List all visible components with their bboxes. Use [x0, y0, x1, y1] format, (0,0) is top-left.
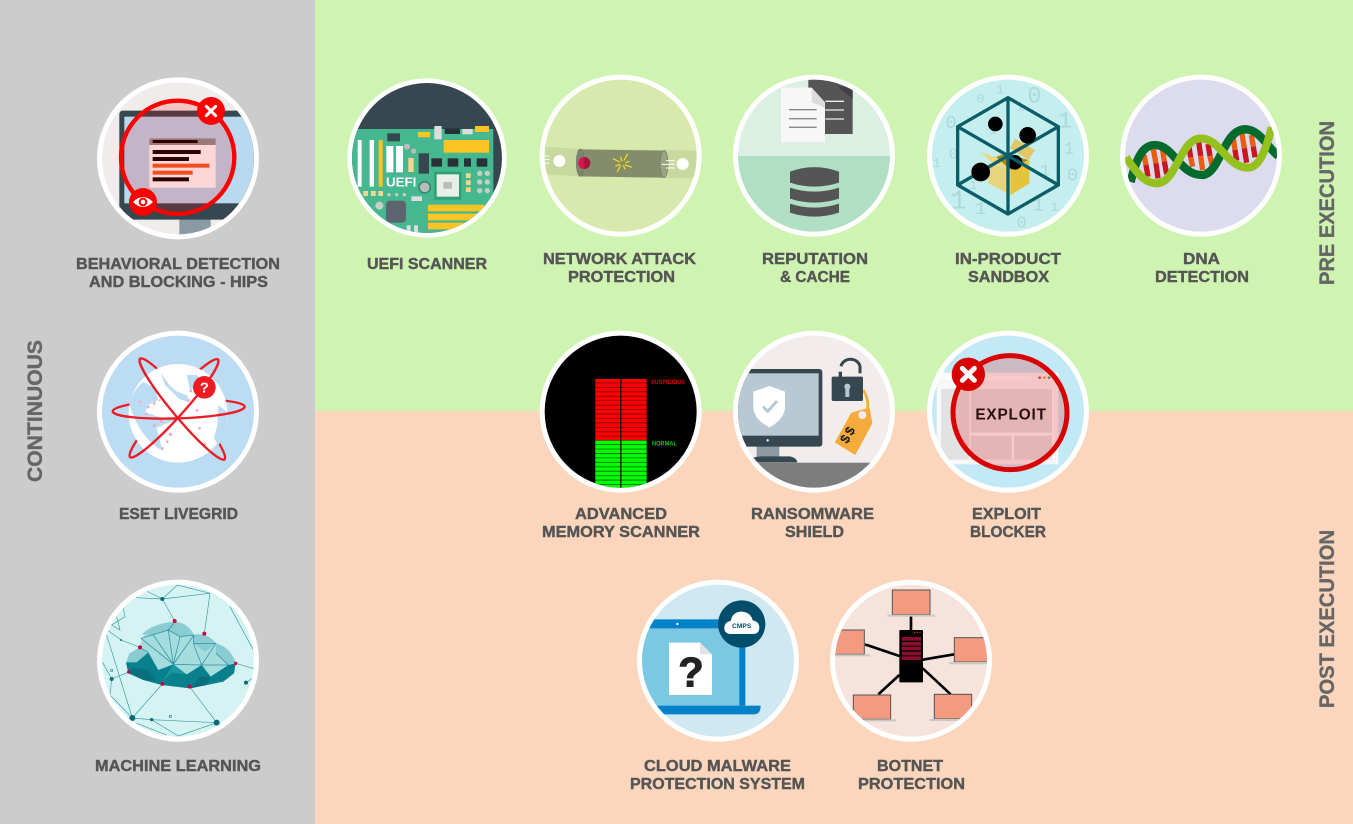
icon: cube with box and binary digits: 1 [1050, 201, 1058, 216]
label: in-product sandbox: IN-PRODUCT [955, 251, 1062, 268]
label: eset livegrid: ESET LIVEGRID [119, 506, 238, 523]
item: ransomware shield [727, 331, 897, 541]
label: behavioral detection: AND BLOCKING - HIPS [89, 274, 268, 291]
icon: cube with box and binary digits: 0 [945, 113, 956, 134]
icon: polygon cloud network [97, 580, 259, 742]
label: botnet protection [858, 758, 965, 793]
icon: cube with box and binary digits: 1 [1033, 195, 1044, 216]
label: machine learning: MACHINE LEARNING [95, 758, 261, 775]
label: ransomware shield: SHIELD [785, 524, 844, 541]
icon: cube with box and binary digits: 1 [975, 199, 986, 220]
label: behavioral detection [76, 256, 280, 291]
icon: monitor, lock and price tag [727, 331, 897, 493]
heading: continuous: CONTINUOUS [24, 340, 47, 482]
label: cloud malware protection system: CLOUD MALWARE [644, 758, 791, 775]
icon: globe with orbits: ? [200, 381, 209, 397]
icon: cube with box and binary digits: 1 [1040, 162, 1050, 181]
label: advanced memory scanner: ADVANCED [575, 506, 667, 523]
heading: pre execution: PRE EXECUTION [1316, 121, 1339, 285]
item: advanced memory scanner [540, 331, 703, 541]
label: reputation and cache: & CACHE [780, 269, 850, 286]
icon: laptop with file and cloud: ? [678, 648, 704, 695]
label: dna detection [1155, 251, 1249, 286]
icon: dna helix [1120, 75, 1283, 237]
label: ransomware shield: RANSOMWARE [751, 506, 874, 523]
icon: cube with box and binary digits: 1 [969, 179, 977, 194]
icon: memory level meter [540, 331, 703, 493]
label: in-product sandbox [955, 251, 1062, 286]
icon: browser under red lens [927, 331, 1090, 493]
item: cloud malware protection system [630, 580, 805, 793]
icon: cube with box and binary digits: 1 [950, 187, 966, 217]
icon: cube with box and binary digits: 1 [1058, 109, 1072, 135]
icon: memory level meter: SUSPICIOUS [651, 380, 685, 386]
item: network attack protection [540, 75, 703, 286]
icon: cube with box and binary digits: 0 [977, 92, 985, 107]
label: behavioral detection: BEHAVIORAL DETECTION [76, 256, 280, 273]
icon: cube with box and binary digits: 0 [949, 147, 958, 164]
label: reputation and cache [762, 251, 868, 286]
icon: server connected to laptops [830, 580, 994, 742]
icon: laptop with file and cloud [637, 580, 800, 742]
icon: circuit board [347, 78, 507, 240]
label: exploit blocker: BLOCKER [970, 524, 1046, 541]
icon: cube with box and binary digits: 1 [1016, 101, 1024, 116]
item: exploit blocker [927, 331, 1090, 541]
icon: documents and database [733, 75, 897, 239]
item: botnet protection [830, 580, 994, 793]
icon: globe with orbits [97, 331, 259, 493]
item: machine learning [95, 580, 261, 775]
label: network attack protection: NETWORK ATTACK [543, 251, 697, 268]
icon: cube with box and binary digits: 1 [996, 83, 1004, 98]
item: reputation and cache [733, 75, 897, 286]
label: reputation and cache: REPUTATION [762, 251, 868, 268]
item: dna detection [1120, 75, 1283, 286]
label: network attack protection [543, 251, 697, 286]
item: in-product sandbox [927, 75, 1090, 286]
label: botnet protection: PROTECTION [858, 776, 965, 793]
panel: post execution background [315, 411, 1353, 824]
label: exploit blocker [970, 506, 1046, 541]
icon: memory level meter: NORMAL [652, 441, 677, 447]
panel: continuous background [0, 0, 315, 824]
heading: post execution: POST EXECUTION [1316, 530, 1339, 708]
icon: cube with box and binary digits: 1 [989, 124, 996, 138]
icon: monitor, lock and price tag: $$ [837, 422, 859, 446]
label: in-product sandbox: SANDBOX [968, 269, 1050, 286]
panel: pre execution background [315, 0, 1353, 411]
label: advanced memory scanner: MEMORY SCANNER [542, 524, 700, 541]
item: eset livegrid [97, 331, 259, 523]
icon: tunnel with packets [540, 75, 703, 237]
icon: cube with box and binary digits: 0 [1017, 214, 1027, 233]
label: dna detection: DETECTION [1155, 269, 1249, 286]
label: cloud malware protection system [630, 758, 805, 793]
label: ransomware shield [751, 506, 874, 541]
label: network attack protection: PROTECTION [568, 269, 675, 286]
icon: cube with box and binary digits [927, 75, 1090, 237]
icon: monitor under red lens [97, 77, 266, 240]
label: botnet protection: BOTNET [877, 758, 944, 775]
icon: browser under red lens: EXPLOIT [975, 406, 1047, 423]
icon: cube with box and binary digits: 1 [933, 157, 941, 172]
label: dna detection: DNA [1183, 251, 1220, 268]
item: uefi scanner [347, 78, 507, 273]
icon: laptop with file and cloud: CMPS [732, 623, 752, 630]
icon: cube with box and binary digits: 1 [1064, 140, 1074, 159]
item: behavioral detection [76, 77, 280, 291]
label: exploit blocker: EXPLOIT [972, 506, 1042, 523]
label: advanced memory scanner [542, 506, 700, 541]
label: cloud malware protection system: PROTECTION SYSTEM [630, 776, 805, 793]
icon: cube with box and binary digits: 0 [1027, 84, 1041, 110]
label: uefi scanner: UEFI SCANNER [367, 256, 487, 273]
icon: circuit board: UEFI [386, 174, 416, 189]
icon: cube with box and binary digits: 0 [1067, 166, 1078, 187]
